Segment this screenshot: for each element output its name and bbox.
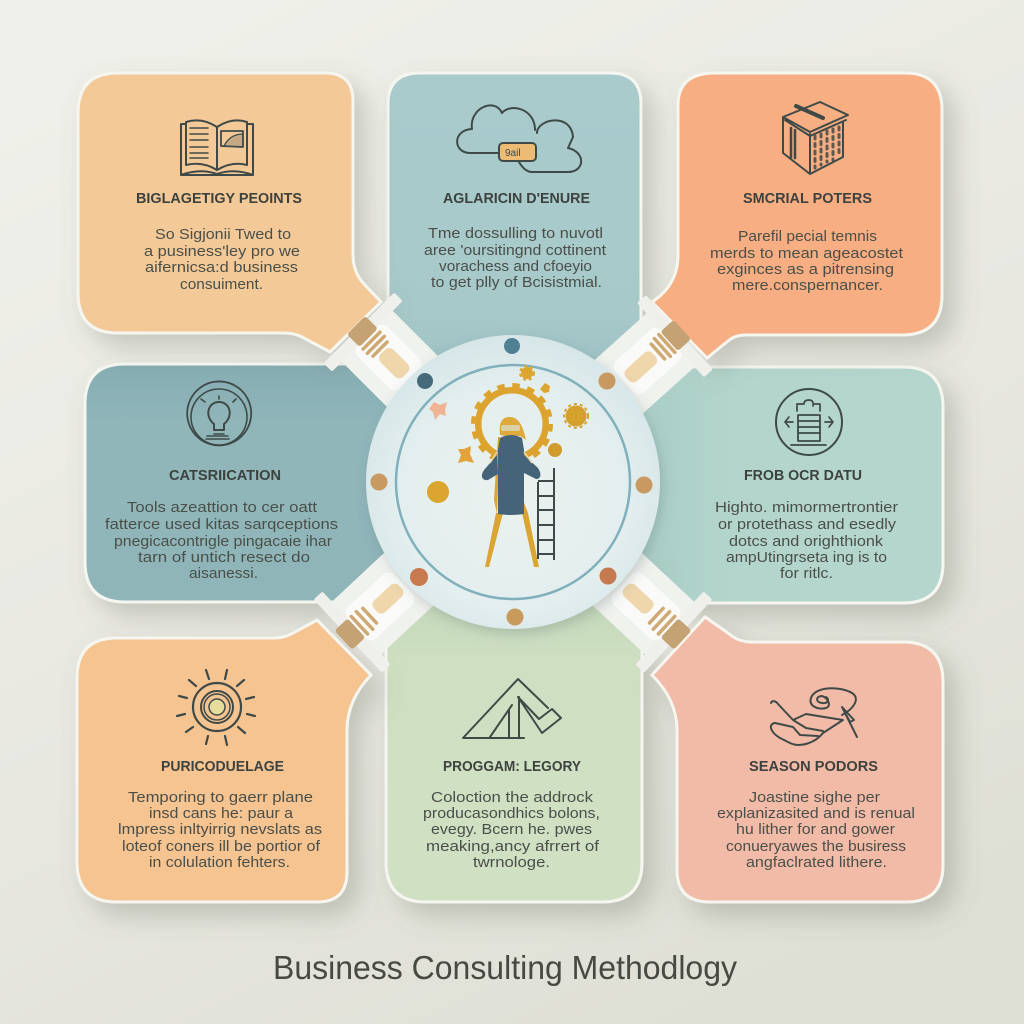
icon: tent with check mark: [463, 679, 561, 738]
icon: open book: [181, 120, 253, 175]
connector arm: top right: [561, 292, 716, 446]
body text: twrnologe.: [473, 854, 550, 871]
body text: meaking,ancy afrrert of: [426, 838, 600, 855]
panel: top left: [78, 73, 381, 352]
panel shape: bottom left: [77, 620, 371, 902]
connector arm: bottom left: [309, 520, 467, 677]
body text: ampUtingrseta ing is to: [726, 549, 887, 566]
body text: [118, 789, 322, 871]
body text: Coloction the addrock: [431, 789, 594, 806]
panel: top right: [652, 73, 942, 358]
large gear: [474, 386, 550, 462]
heading: FROB OCR DATU: [744, 468, 862, 484]
body text: Joastine sighe per: [749, 789, 880, 806]
body text: explanizasited and is renual: [717, 805, 915, 822]
panel shape: top left: [78, 73, 381, 352]
body text: mere.conspernancer.: [732, 277, 883, 294]
heading: AGLARICIN D'ENURE: [443, 191, 590, 207]
panel: top middle: [388, 73, 641, 420]
body text: [105, 499, 338, 582]
ladder: [538, 468, 554, 560]
body text: hu lither for and gower: [736, 821, 895, 838]
body text: insd cans he: paur a: [149, 805, 294, 822]
body text: pnegicacontrigle pingacaie ihar: [114, 533, 332, 550]
body text: for ritlc.: [780, 565, 833, 582]
body text: [717, 789, 915, 871]
body text: in colulation fehters.: [149, 854, 290, 871]
disc ring: [396, 365, 630, 599]
body text: vorachess and cfoeyio: [439, 258, 592, 275]
body text: [423, 789, 600, 871]
body text: aree 'oursitingnd cottinent: [424, 242, 607, 259]
body text: lmpress inltyirrig nevslats as: [118, 821, 322, 838]
body text: aifernicsa:d business: [145, 259, 298, 276]
heading: BIGLAGETIGY PEOINTS: [136, 191, 302, 207]
body text: merds to mean ageacostet: [710, 245, 904, 262]
panel shape: top right: [652, 73, 942, 358]
body text: consuiment.: [180, 276, 263, 293]
body text: dotcs and orighthionk: [729, 533, 884, 550]
heading: PROGGAM: LEGORY: [443, 759, 581, 775]
icon: hand with palette: [771, 688, 857, 745]
body text: fatterce used kitas sarqceptions: [105, 516, 338, 533]
disc base: [366, 335, 660, 629]
title: Business Consulting Methodlogy: [273, 949, 737, 986]
heading: PURICODUELAGE: [161, 759, 284, 775]
body text: conueryawes the busiress: [726, 838, 906, 855]
rim dots: [370, 338, 652, 626]
icon: box with grid: [783, 102, 848, 174]
panel shape: bottom middle: [386, 560, 642, 902]
panel shape: middle left: [85, 364, 430, 602]
icon: stack with arrows in circle: [776, 389, 842, 455]
body text: Tools azeattion to cer oatt: [127, 499, 318, 516]
panel shape: top middle: [388, 73, 641, 420]
body text: loteof coners ill be portior of: [122, 838, 321, 855]
icon: cloud with tag: 9ail: [505, 148, 521, 159]
body text: to get plly of Bcisistmial.: [431, 274, 602, 291]
consultant figure: [482, 417, 540, 567]
body text: angfaclrated lithere.: [746, 854, 887, 871]
body text: [424, 225, 607, 291]
central disc: [366, 335, 660, 629]
body text: tarn of untich resect do: [138, 549, 310, 566]
heading: SEASON PODORS: [749, 759, 878, 775]
panel shape: middle right: [600, 367, 943, 603]
body text: a pusiness'ley pro we: [144, 243, 300, 260]
body text: [144, 226, 300, 293]
body text: evegy. Bcern he. pwes: [431, 821, 592, 838]
body text: Temporing to gaerr plane: [128, 789, 313, 806]
panel: middle left: [85, 364, 430, 602]
panel shape: bottom right: [652, 617, 943, 902]
body text: So Sigjonii Twed to: [155, 226, 291, 243]
panel: bottom right: [652, 617, 943, 902]
connector arm: bottom right: [559, 520, 717, 677]
body text: exginces as a pitrensing: [717, 261, 894, 278]
heading: SMCRIAL POTERS: [743, 191, 872, 207]
body text: [710, 228, 904, 294]
body text: producasondhics bolons,: [423, 805, 600, 822]
icon: sun: [177, 670, 255, 745]
body text: Parefil pecial temnis: [738, 228, 877, 245]
body text: or protethass and esedly: [718, 516, 897, 533]
panel: bottom middle: [386, 560, 642, 902]
body text: [715, 499, 898, 582]
panel: bottom left: [77, 620, 371, 902]
panel: middle right: [600, 367, 943, 603]
body text: Tme dossulling to nuvotl: [428, 225, 603, 242]
connector arm: top left: [321, 290, 471, 440]
icon: cloud with tag: [457, 105, 581, 172]
icon: light bulb in circle: [187, 381, 251, 445]
body text: aisanessi.: [189, 565, 258, 582]
body text: Highto. mimormertrontier: [715, 499, 898, 516]
heading: CATSRIICATION: [169, 468, 281, 484]
decorative gears and stars: [427, 366, 588, 503]
